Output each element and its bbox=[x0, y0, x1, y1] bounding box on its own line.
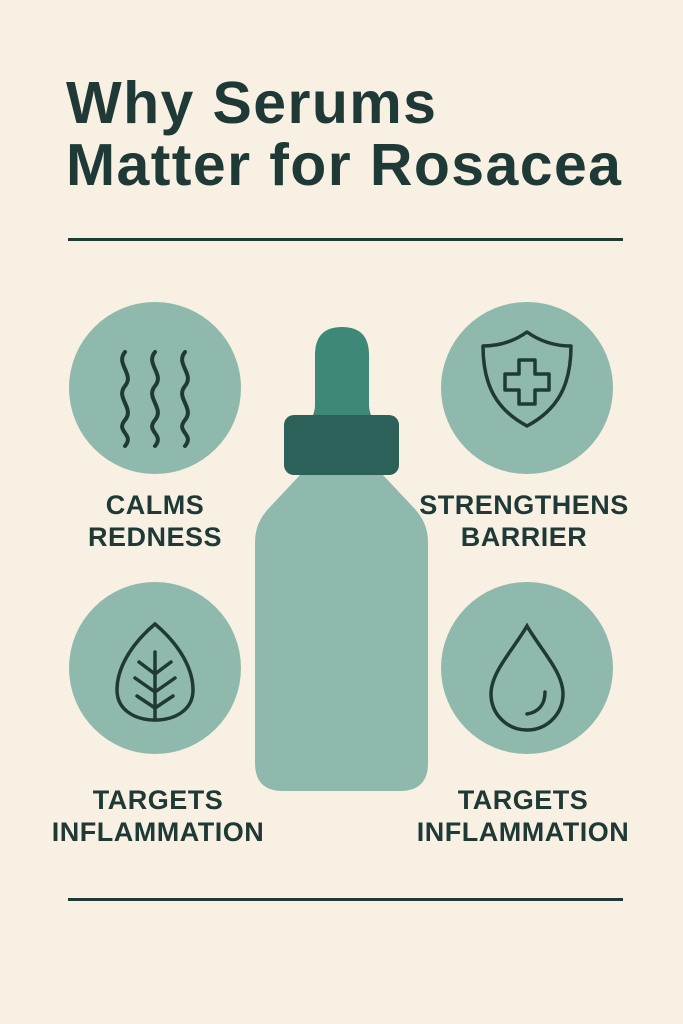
label: targets inflammation right: INFLAMMATION bbox=[417, 817, 629, 847]
title: Why Serums bbox=[66, 70, 437, 136]
label: targets inflammation right bbox=[417, 785, 629, 847]
icon: waves circle bbox=[69, 302, 241, 474]
label: calms redness: REDNESS bbox=[88, 522, 222, 552]
label: targets inflammation right: TARGETS bbox=[458, 785, 588, 815]
label: strengthens barrier: STRENGTHENS bbox=[419, 490, 629, 520]
title bbox=[66, 70, 622, 198]
bottle bbox=[255, 327, 428, 791]
label: strengthens barrier bbox=[419, 490, 629, 552]
icon: leaf circle bbox=[69, 582, 241, 754]
label: calms redness bbox=[88, 490, 222, 552]
label: targets inflammation left bbox=[52, 785, 264, 847]
label: strengthens barrier: BARRIER bbox=[461, 522, 587, 552]
label: calms redness: CALMS bbox=[106, 490, 204, 520]
label: targets inflammation left: INFLAMMATION bbox=[52, 817, 264, 847]
label: targets inflammation left: TARGETS bbox=[93, 785, 223, 815]
icon: drop circle bbox=[441, 582, 613, 754]
icon: shield circle bbox=[441, 302, 613, 474]
title: Matter for Rosacea bbox=[66, 132, 622, 198]
